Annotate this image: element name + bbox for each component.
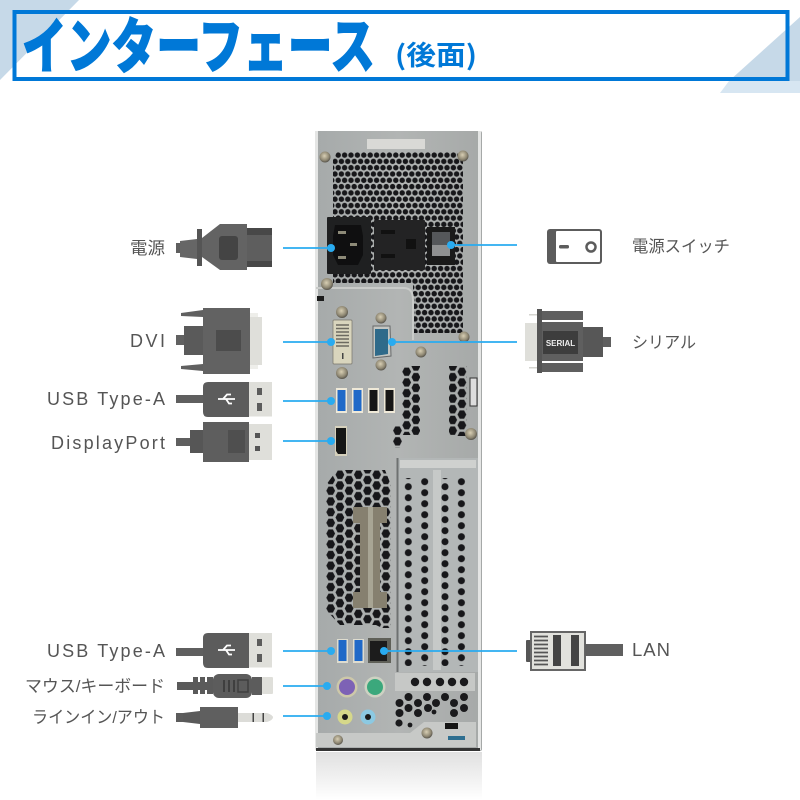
- title frame: [14, 12, 788, 79]
- USB ports upper: [336, 388, 395, 413]
- bottom edge: [316, 748, 480, 751]
- serial port: [373, 312, 391, 370]
- lower vent holes: [395, 693, 468, 727]
- PCI slot holes: [404, 478, 470, 666]
- power inlet: [327, 217, 371, 274]
- warning label: [367, 139, 425, 149]
- USB symbol: [218, 394, 235, 404]
- callout: mouse keyboard: [283, 682, 331, 690]
- label: USB Type-A upper: USB Type-A: [47, 389, 165, 409]
- power switch: [427, 227, 455, 265]
- label: serial: シリアル: [632, 334, 696, 352]
- bottom slot light: [448, 736, 465, 740]
- chassis reflection: [316, 752, 482, 800]
- audio ports: [338, 710, 376, 724]
- header background: bottom-right triangle: [729, 17, 800, 81]
- large honeycomb vents: [326, 470, 391, 628]
- header background: top-left triangle: [0, 0, 79, 80]
- icon: USB connector upper: [176, 382, 272, 417]
- icon: LAN connector: [526, 632, 623, 670]
- icon: DVI connector: [176, 308, 262, 374]
- bracket highlight: [368, 507, 373, 608]
- DisplayPort port: [335, 426, 347, 456]
- right upper vents: [449, 366, 467, 436]
- upper vents: [402, 366, 420, 435]
- chassis screws: [320, 150, 470, 745]
- icon: audio plug: [176, 707, 273, 728]
- USB symbol: [218, 646, 235, 654]
- label: power: 電源: [130, 239, 165, 258]
- PCI top bar: [400, 460, 476, 468]
- callout: LAN: [380, 647, 517, 655]
- callout: power switch: [447, 241, 517, 249]
- inner bracket outline: [316, 288, 413, 340]
- icon: serial connector: [525, 309, 611, 373]
- subtitle: (後面): [395, 34, 477, 73]
- PSU vent holes: [333, 152, 463, 333]
- icon: PS/2 connector: [177, 674, 273, 698]
- side handle slot: [470, 378, 477, 406]
- serial label: SERIAL: [546, 339, 575, 348]
- label: USB Type-A lower: USB Type-A: [47, 641, 165, 661]
- side screw: [465, 428, 477, 440]
- callout: USB lower: [283, 647, 335, 655]
- bottom slot black: [445, 723, 458, 729]
- computer rear panel: [316, 131, 482, 751]
- icon: power plug: [176, 224, 272, 270]
- PCI slot centre strip: [433, 470, 441, 670]
- icon: DisplayPort connector: [176, 422, 272, 462]
- chassis body: [316, 131, 482, 751]
- chassis edges: [316, 131, 480, 750]
- callout: DVI: [283, 338, 335, 346]
- label: power switch: 電源スイッチ: [632, 237, 730, 256]
- label: DisplayPort: DisplayPort: [51, 433, 165, 453]
- PCI slot dividers: [396, 458, 398, 672]
- callout: power inlet: [283, 244, 335, 252]
- icon: power switch: [547, 229, 602, 264]
- label: DVI: DVI: [130, 331, 165, 351]
- DVI port: [333, 306, 352, 379]
- PCI lower bar: [395, 673, 475, 691]
- header background: lower strip: [720, 81, 800, 93]
- power outlet blank: [374, 220, 425, 270]
- left of upper vents: [393, 426, 402, 448]
- label: line in out: ラインイン/アウト: [32, 708, 165, 727]
- icon: USB connector lower: [176, 633, 272, 668]
- callout: DisplayPort: [283, 437, 335, 445]
- title: インターフェース: [22, 0, 375, 86]
- USB ports lower: [337, 639, 364, 663]
- label: LAN: LAN: [632, 639, 670, 660]
- bracket notch: [317, 296, 324, 301]
- label: mouse keyboard: マウス/キーボード: [25, 677, 165, 696]
- inner expansion bracket: [353, 507, 387, 608]
- callout: line in out: [283, 712, 331, 720]
- PCI bracket metal: [397, 458, 478, 672]
- PS/2 ports: [336, 676, 386, 698]
- callout: serial: [388, 338, 517, 346]
- callout: USB upper: [283, 397, 335, 405]
- bottom rail: [316, 722, 476, 747]
- LAN port: [368, 638, 391, 663]
